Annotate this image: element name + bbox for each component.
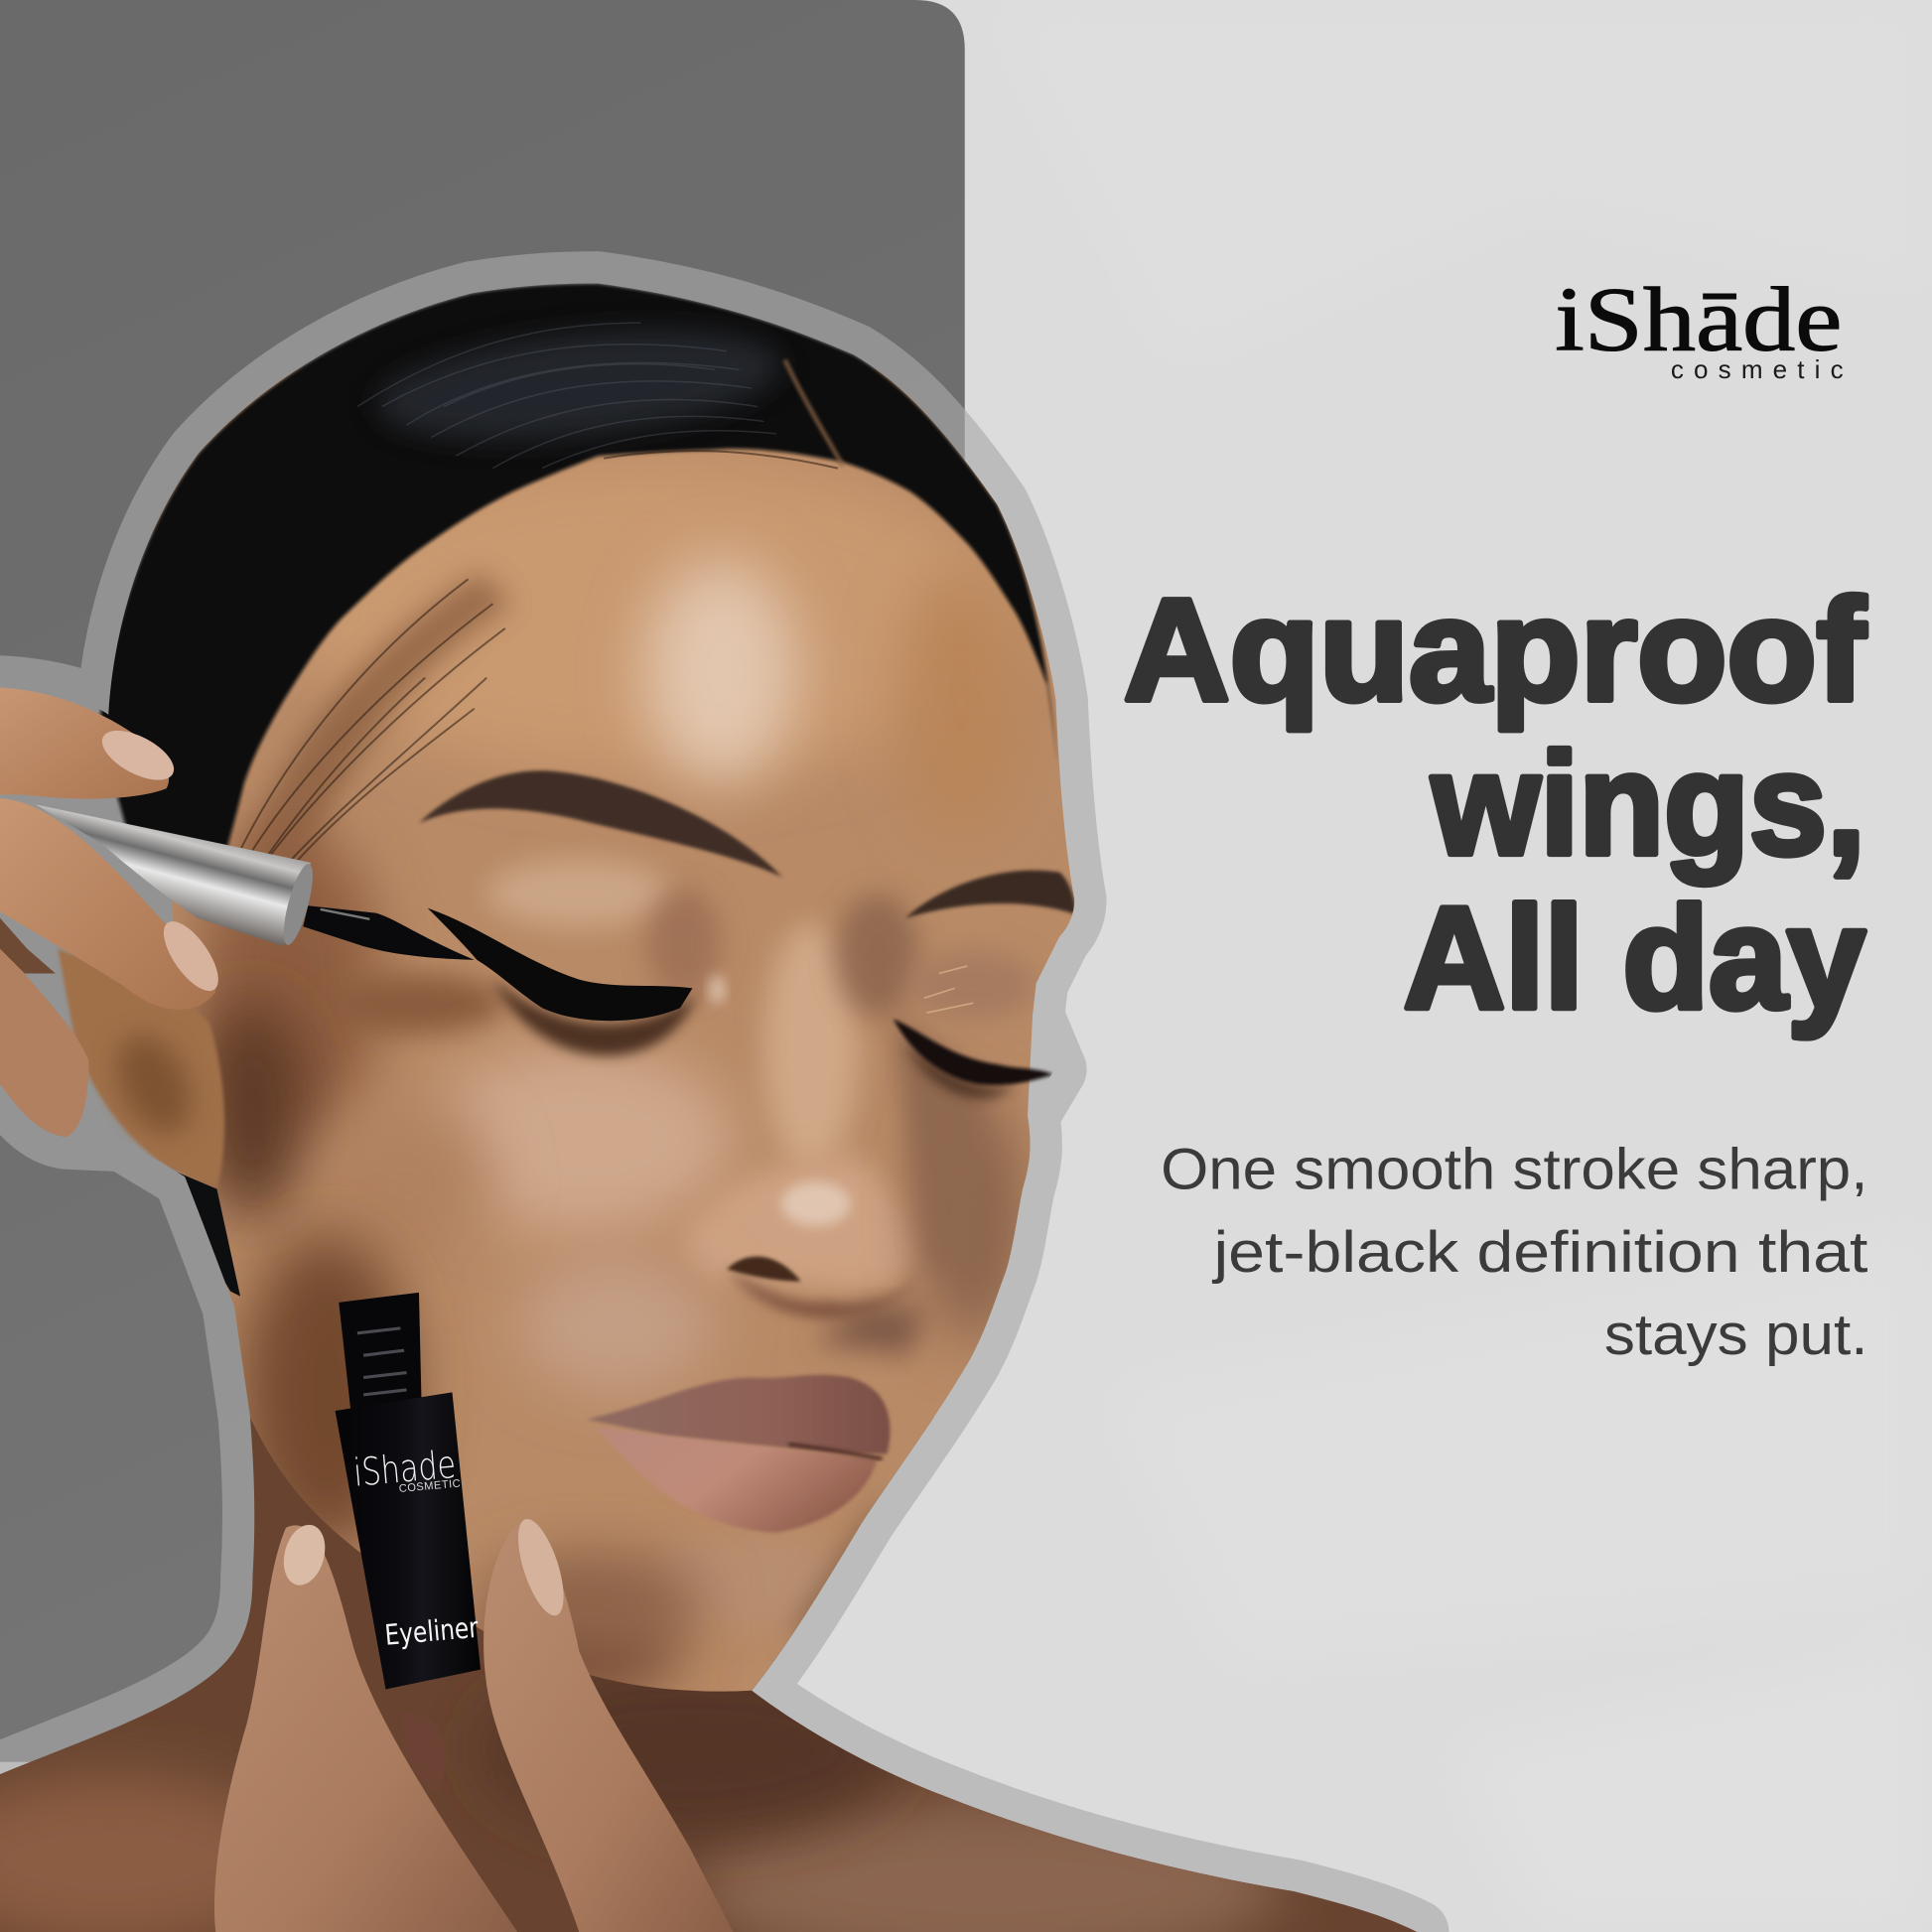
- headline: All day: [1404, 877, 1865, 1039]
- hair: [98, 283, 1057, 1297]
- forehead tone: [296, 456, 1011, 776]
- headline: wings,: [1431, 723, 1865, 886]
- nostril and nose shadow: [727, 1257, 921, 1318]
- hair parting: [785, 359, 843, 466]
- bottle sublabel: COSMETIC: [398, 1478, 461, 1495]
- forehead highlight: [644, 561, 797, 782]
- right eyelid shimmer: [924, 966, 973, 1013]
- panel: dark grey rounded backdrop: [0, 0, 965, 1762]
- left eyeliner wing and lashes: [428, 908, 692, 1021]
- cheek: [425, 1047, 733, 1232]
- headline: [1124, 569, 1866, 1039]
- headline: Aquaproof: [1124, 569, 1866, 732]
- left eyebrow: [419, 770, 782, 878]
- nose: [763, 924, 858, 1171]
- body text: jet-black definition that: [1211, 1220, 1867, 1285]
- lips: [587, 1375, 890, 1533]
- left eye shadow: [492, 980, 696, 1055]
- figure: model portrait: [0, 283, 1478, 1932]
- body text: One smooth stroke sharp,: [1161, 1138, 1867, 1202]
- product bottle: [336, 1293, 481, 1690]
- face skin: [155, 369, 1074, 1692]
- logo: [1555, 268, 1844, 384]
- logo wordmark: iShāde: [1555, 268, 1842, 369]
- logo tagline: cosmetic: [1671, 354, 1844, 384]
- bottle product name: Eyeliner: [383, 1611, 480, 1652]
- hair below ear: [176, 1172, 240, 1297]
- baby hairs at temple: [240, 451, 838, 888]
- right eyebrow: [905, 871, 1075, 918]
- bottle neck: [339, 1293, 421, 1415]
- ear: [58, 949, 224, 1189]
- hand holding bottle: [214, 1514, 733, 1932]
- halo outline around figure: [0, 283, 1417, 1932]
- eyelid: [486, 859, 671, 928]
- bottle label: iShade: [351, 1443, 458, 1496]
- right eye lashes: [894, 1019, 1053, 1098]
- neck and shoulders: [0, 1417, 1478, 1932]
- body text: stays put.: [1604, 1303, 1867, 1367]
- hair sheen: [373, 321, 784, 448]
- jaw and chin: [240, 1232, 413, 1553]
- hairline warm tone: [240, 573, 511, 888]
- hand holding eyeliner pen: [0, 688, 228, 1138]
- bottle body: [336, 1392, 481, 1690]
- body text: [1161, 1138, 1867, 1367]
- hair strands: [357, 323, 776, 469]
- right side of face shadow: [835, 894, 919, 1017]
- eyeliner pen: [36, 804, 475, 960]
